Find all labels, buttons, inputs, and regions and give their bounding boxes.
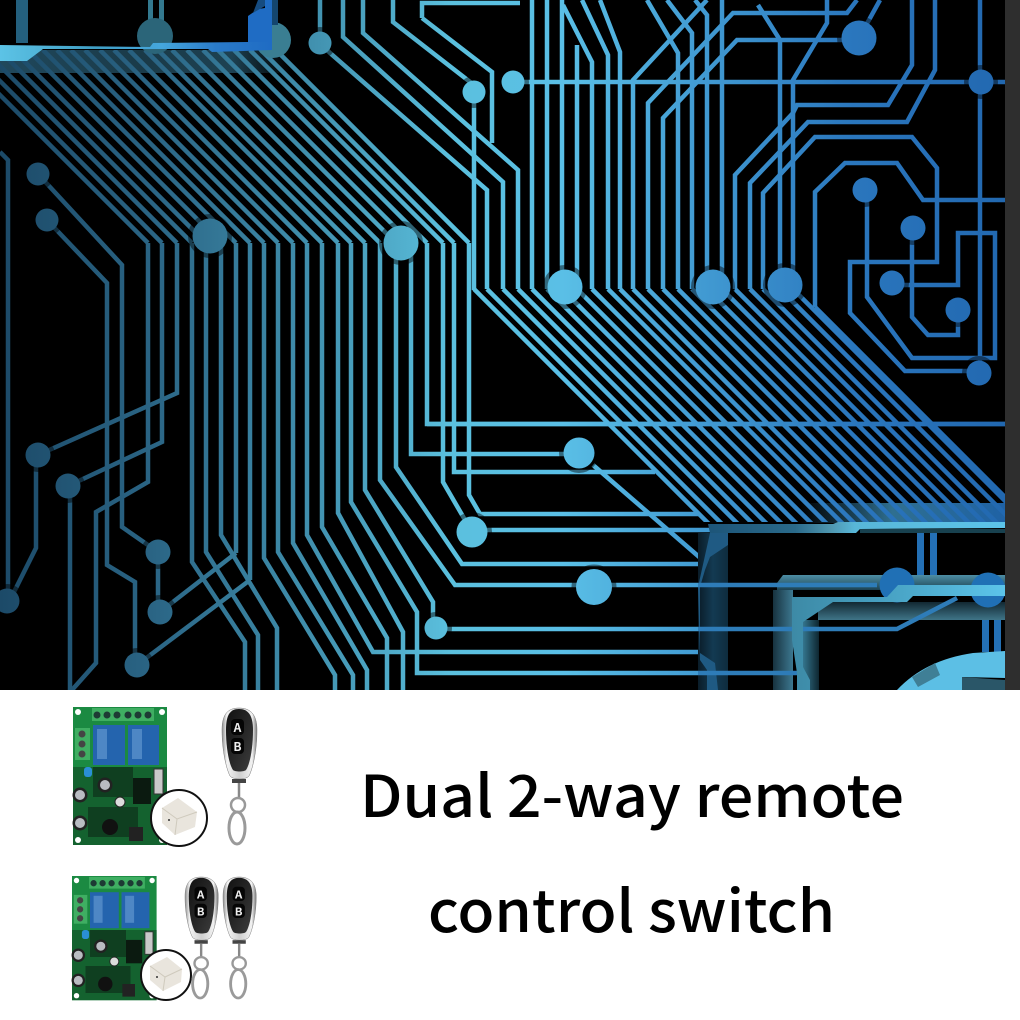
white caption panel (0, 690, 1020, 1020)
lower-right diagonal trace bundle (474, 289, 1020, 529)
inset: white receiver case (151, 790, 207, 846)
key fob remote two (223, 877, 256, 998)
lower-right chip frames (698, 522, 1006, 690)
bright top rail (708, 522, 1005, 533)
key fob remote one: A (196, 887, 205, 902)
gauge ring (897, 651, 1005, 690)
horizontal trace over bundle (427, 422, 1005, 426)
bottom-right shadow band (800, 503, 1005, 523)
product photo: receiver board with two remotes (72, 876, 256, 1000)
upper-left diagonal trace bundle (0, 50, 469, 243)
right edge strip (1005, 0, 1020, 690)
inset: white receiver case (141, 950, 191, 1000)
key fob remote (222, 708, 257, 844)
key fob remote: B (233, 738, 242, 755)
traces crossing frame (698, 585, 957, 673)
bright L-shaped frame (792, 585, 1005, 690)
upper-right routed traces (320, 0, 1005, 373)
frame top shadow (777, 575, 1005, 590)
key fob remote two: A (234, 887, 243, 902)
connection pads (0, 20, 994, 678)
central vertical traces fanning to the lower right (0, 152, 1005, 690)
key fob remote one (185, 877, 218, 998)
receiver circuit board (72, 707, 167, 845)
key fob remote two: B (235, 904, 243, 919)
key fob remote: A (233, 719, 242, 736)
title line one: Dual 2-way remote (360, 750, 904, 834)
title line two: control switch (428, 865, 835, 949)
circuit board background (0, 0, 1020, 690)
dark vertical connector column (698, 533, 728, 690)
top-left chip shadow band (0, 50, 290, 73)
product photo: receiver board with one remote (72, 707, 257, 846)
vertical double traces (917, 533, 937, 575)
top-left chip outline (0, 0, 291, 61)
key fob remote one: B (197, 904, 205, 919)
receiver circuit board (72, 876, 157, 1000)
